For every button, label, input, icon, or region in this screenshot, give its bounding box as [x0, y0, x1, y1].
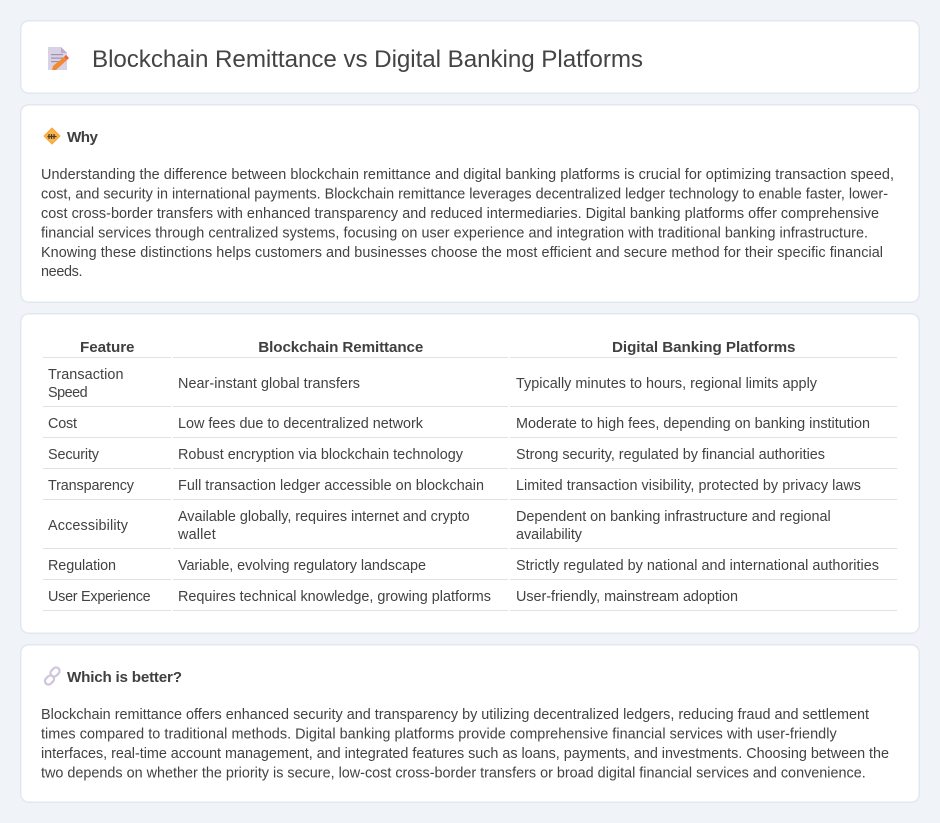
icon: document with pencil [48, 47, 69, 70]
text block: which is better paragraph: times compared to traditional methods. Digital banking platforms provide comprehensive financial services with user-friendly [41, 726, 837, 742]
heading: which is better: Which is better? [67, 669, 182, 686]
text block: why paragraph: needs. [41, 264, 82, 280]
row: transparency: Transparency [48, 478, 135, 494]
icon: chain link [43, 666, 61, 686]
panel: why [21, 105, 919, 302]
table header: Blockchain Remittance [258, 339, 423, 356]
text block: which is better paragraph: interfaces, real-time account management, and integrated features such as loans, payments, and investments. Choosing between the [41, 746, 889, 762]
text block: why paragraph: Knowing these distinctions helps customers and businesses choose the most efficient and secure method for their specific financial [41, 245, 883, 261]
text block: why paragraph: cost, and security in international payments. Blockchain remittance leverages decentralized ledger technology to enable faster, lower- [41, 186, 888, 202]
panel: title header [21, 21, 919, 93]
panel: which is better [21, 645, 919, 802]
table header: Digital Banking Platforms [612, 339, 796, 356]
row: security: Security [48, 447, 100, 463]
title: Blockchain Remittance vs Digital Banking Platforms [92, 46, 643, 73]
row: transaction speed [43, 367, 897, 407]
row: accessibility: wallet [177, 527, 216, 543]
text block: which is better paragraph: Blockchain remittance offers enhanced security and transparency by utilizing decentralized ledgers, reducing fraud and settlement [41, 707, 869, 723]
row: transaction speed: Transaction [48, 367, 124, 383]
row: accessibility: Accessibility [48, 518, 129, 534]
row: cost: Moderate to high fees, depending on banking institution [516, 416, 870, 432]
panel: comparison table [21, 314, 919, 633]
row: transparency [43, 478, 897, 500]
text block: why paragraph: Understanding the difference between blockchain remittance and digital banking platforms is crucial for optimizing transaction speed, [41, 167, 894, 183]
row: security [43, 447, 897, 469]
row: regulation [43, 558, 897, 580]
row: user experience [43, 589, 897, 611]
row: accessibility [43, 509, 897, 549]
row: regulation: Strictly regulated by national and international authorities [516, 558, 879, 574]
row: transaction speed: Speed [48, 385, 88, 401]
row: accessibility: Available globally, requires internet and crypto [178, 509, 470, 525]
row: accessibility: Dependent on banking infrastructure and regional [516, 509, 831, 525]
row: regulation: Regulation [48, 558, 116, 574]
row: cost: Low fees due to decentralized network [178, 416, 424, 432]
row: transparency: Full transaction ledger accessible on blockchain [178, 478, 484, 494]
row: transaction speed: Near-instant global transfers [178, 376, 360, 392]
table header: Feature [80, 339, 134, 356]
text block: which is better paragraph: two depends on whether the priority is secure, low-cost cross-border transfers or broad digital financial services and convenience. [41, 766, 866, 782]
row: accessibility: availability [516, 527, 583, 543]
text block: which is better paragraph [41, 707, 889, 782]
text block: why paragraph: cost cross-border transfers with enhanced transparency and reduced intermediaries. Digital banking platforms offer comprehensive [41, 206, 879, 222]
heading: why: Why [67, 129, 99, 146]
row: user experience: User Experience [48, 589, 151, 605]
row: user experience: User-friendly, mainstream adoption [516, 589, 738, 605]
row: security: Strong security, regulated by financial authorities [516, 447, 825, 463]
row: cost [43, 416, 897, 438]
row: transaction speed: Typically minutes to hours, regional limits apply [516, 376, 818, 392]
icon: warning diamond [44, 128, 60, 144]
text block: why paragraph: financial services through centralized systems, focusing on user experience and integration with traditional banking infrastructure. [41, 226, 868, 242]
row: transparency: Limited transaction visibility, protected by privacy laws [516, 478, 861, 494]
row: regulation: Variable, evolving regulatory landscape [178, 558, 426, 574]
row: security: Robust encryption via blockchain technology [178, 447, 464, 463]
table header [43, 339, 897, 358]
row: cost: Cost [48, 416, 77, 432]
row: user experience: Requires technical knowledge, growing platforms [178, 589, 491, 605]
text block: why paragraph [41, 167, 894, 280]
